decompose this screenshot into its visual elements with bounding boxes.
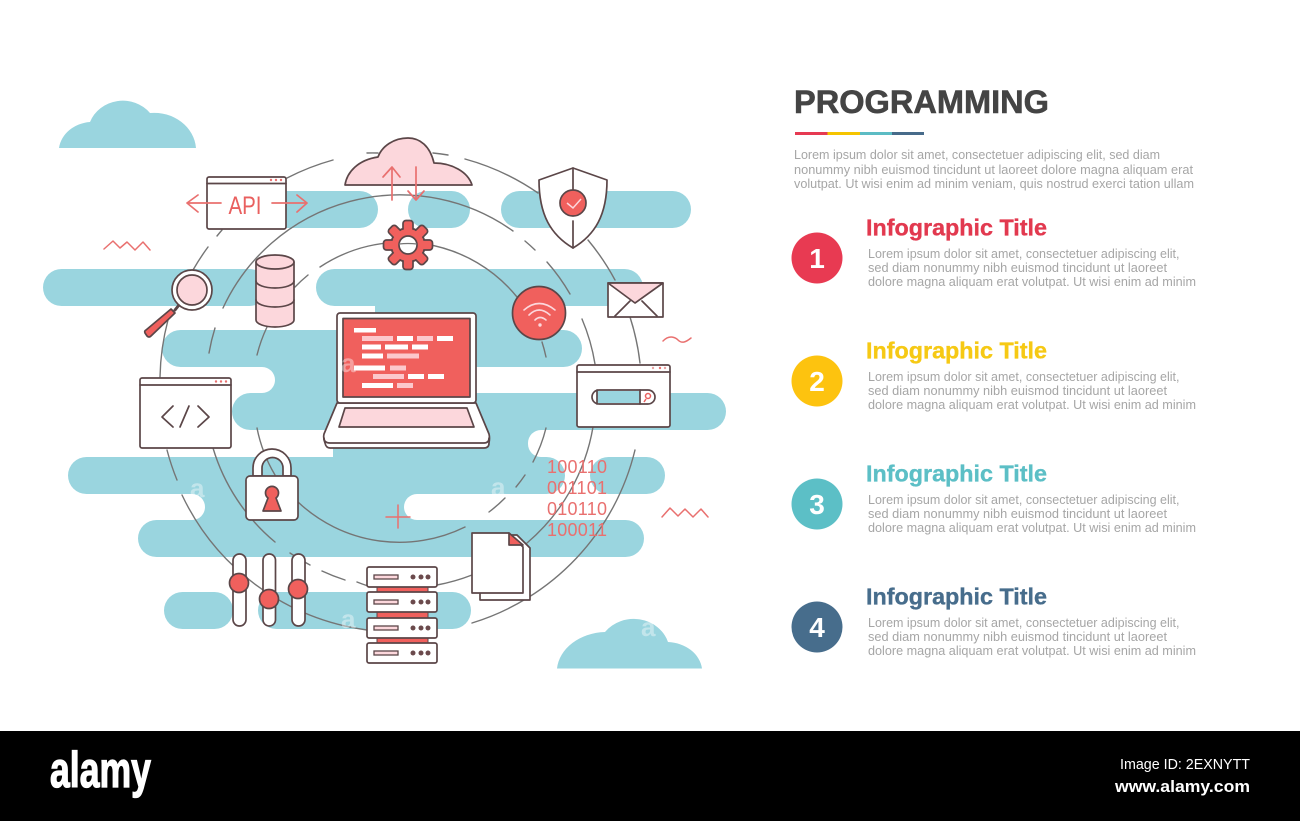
icon: magnifier <box>145 270 212 337</box>
binary code text: 100110 <box>547 457 607 477</box>
binary code text <box>547 457 607 540</box>
icon: wifi badge <box>512 286 566 340</box>
faint watermark letters: a <box>341 348 356 378</box>
faint watermark letters: a <box>491 472 506 502</box>
intro paragraph: Lorem ipsum dolor sit amet, consectetuer adipiscing elit, sed diam <box>794 148 1160 162</box>
icon: slider controls <box>230 554 308 626</box>
item 2 <box>792 338 1196 412</box>
icon: shield with check <box>539 168 607 248</box>
decorative zigzags, tilde and plus <box>104 241 708 528</box>
item 3: 3 <box>809 489 825 520</box>
title: PROGRAMMING <box>794 84 1049 120</box>
footer band with logo and image ID: www.alamy.com <box>1114 777 1250 796</box>
item 4: 4 <box>809 612 825 643</box>
item 4: Infographic Title <box>866 584 1047 610</box>
intro paragraph: nonummy nibh euismod tincidunt ut laoreet dolore magna aliquam erat <box>794 163 1194 177</box>
binary code text: 010110 <box>547 499 607 519</box>
icon: server rack <box>367 567 437 663</box>
faint watermark letters: a <box>794 479 809 509</box>
intro paragraph: volutpat. Ut wisi enim ad minim veniam, quis nostrud exerci tation ullam <box>794 177 1194 191</box>
icon: document pages <box>472 533 530 600</box>
item 4 <box>792 584 1196 658</box>
icon: code window <box>140 378 231 448</box>
item 3: Infographic Title <box>866 460 1047 486</box>
concentric dashed rings <box>160 153 640 630</box>
item 2: 2 <box>809 366 825 397</box>
icon: browser search window <box>577 365 670 427</box>
footer band with logo and image ID <box>0 731 1300 821</box>
faint watermark letters <box>190 348 809 642</box>
item 3 <box>792 460 1196 535</box>
icon: gear <box>384 220 432 270</box>
icon: laptop with code <box>324 313 490 448</box>
item 2: sed diam nonummy nibh euismod tincidunt ut laoreet <box>868 384 1168 398</box>
item 1: Infographic Title <box>866 214 1047 240</box>
intro paragraph <box>794 148 1194 191</box>
colour divider <box>795 132 924 135</box>
item 1: dolore magna aliquam erat volutpat. Ut wisi enim ad minim <box>868 275 1196 289</box>
item 3: Lorem ipsum dolor sit amet, consectetuer adipiscing elit, <box>868 493 1180 507</box>
item 4: dolore magna aliquam erat volutpat. Ut wisi enim ad minim <box>868 644 1196 658</box>
item 1: sed diam nonummy nibh euismod tincidunt ut laoreet <box>868 261 1168 275</box>
item 1: Lorem ipsum dolor sit amet, consectetuer adipiscing elit, <box>868 247 1180 261</box>
faint watermark letters: a <box>641 612 656 642</box>
icon: API window <box>187 177 307 229</box>
item 3: sed diam nonummy nibh euismod tincidunt ut laoreet <box>868 507 1168 521</box>
icon: cloud with up and down arrows <box>345 138 472 200</box>
binary code text: 100011 <box>547 520 607 540</box>
item 2: Infographic Title <box>866 338 1047 364</box>
faint watermark letters: a <box>341 604 356 634</box>
icon: padlock <box>246 449 298 520</box>
background: teal clouds and pill bands <box>43 101 726 668</box>
item 3: dolore magna aliquam erat volutpat. Ut wisi enim ad minim <box>868 521 1196 535</box>
item 2: dolore magna aliquam erat volutpat. Ut wisi enim ad minim <box>868 398 1196 412</box>
binary code text: 001101 <box>547 478 607 498</box>
item 2: Lorem ipsum dolor sit amet, consectetuer adipiscing elit, <box>868 370 1180 384</box>
icon: envelope <box>608 283 663 317</box>
icon: API window: API <box>228 192 262 220</box>
icon: database <box>256 255 294 327</box>
item 1 <box>792 214 1196 289</box>
footer band with logo and image ID: alamy <box>50 742 151 798</box>
faint watermark letters: a <box>190 473 205 503</box>
item 4: Lorem ipsum dolor sit amet, consectetuer adipiscing elit, <box>868 616 1180 630</box>
item 4: sed diam nonummy nibh euismod tincidunt ut laoreet <box>868 630 1168 644</box>
item 1: 1 <box>809 243 825 274</box>
footer band with logo and image ID: Image ID: 2EXNYTT <box>1120 756 1250 773</box>
